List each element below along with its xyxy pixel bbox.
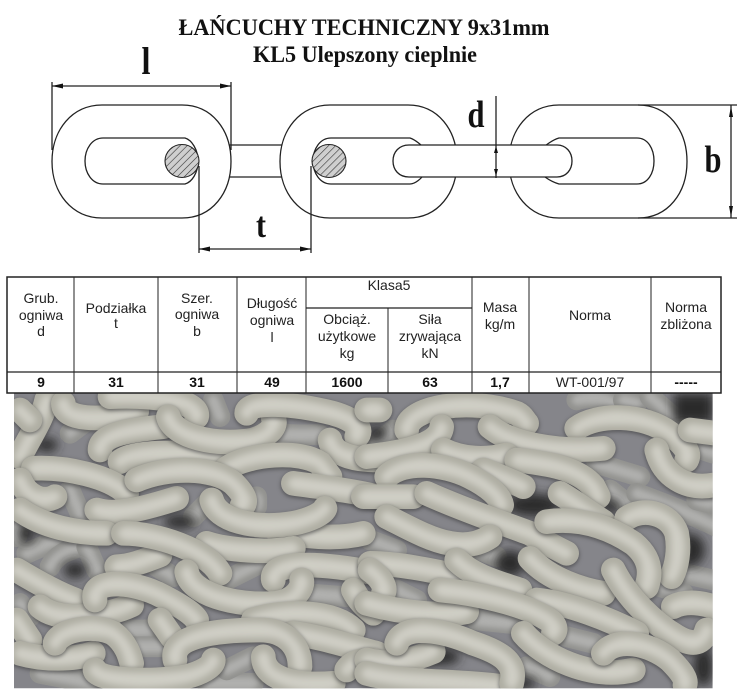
table header: kg/m xyxy=(485,316,515,332)
table data row: 9 xyxy=(37,374,45,390)
table header: Masa xyxy=(483,299,517,315)
title xyxy=(178,15,550,67)
chain diagram xyxy=(52,105,687,218)
table header: b xyxy=(193,323,201,339)
table header: Podziałka xyxy=(86,300,147,316)
front chain links right xyxy=(363,405,717,687)
table header: l xyxy=(270,329,274,345)
chain link 2 xyxy=(280,105,457,218)
dimension b: b xyxy=(704,139,722,181)
dimension b xyxy=(638,105,737,218)
hatched section middle xyxy=(312,144,346,178)
table header xyxy=(19,277,712,361)
connector link right xyxy=(393,145,572,177)
table header: Siła xyxy=(418,311,442,327)
dimension d xyxy=(468,94,498,178)
table data row: 1,7 xyxy=(490,374,510,390)
dimension d: d xyxy=(468,94,484,136)
chain link 1 xyxy=(52,105,231,218)
dimension l xyxy=(52,40,231,150)
hatched section left xyxy=(165,144,199,178)
table header: Długość xyxy=(247,295,297,311)
rear chain links right xyxy=(370,397,717,677)
dark gaps between links xyxy=(18,393,713,690)
table header: Norma xyxy=(569,307,611,323)
table header: ogniwa xyxy=(175,306,219,322)
specification table xyxy=(6,276,722,394)
table header: Grub. xyxy=(23,290,59,306)
chain link 3 xyxy=(509,105,687,218)
table header: Norma xyxy=(665,299,707,315)
table data row: WT-001/97 xyxy=(556,374,624,390)
table header: użytkowe xyxy=(318,328,376,344)
technical drawing and title xyxy=(51,15,737,253)
table header: zrywająca xyxy=(399,328,461,344)
dimension t xyxy=(199,166,311,253)
photo background xyxy=(14,393,713,688)
table header: t xyxy=(114,315,118,331)
table header: kg xyxy=(340,345,354,361)
table data row xyxy=(37,374,698,390)
table header: kN xyxy=(421,345,439,361)
table data row: ----- xyxy=(674,374,698,390)
table header: Klasa5 xyxy=(368,277,411,293)
dimension l: l xyxy=(142,40,151,83)
rear chain links left xyxy=(17,400,483,683)
title: KL5 Ulepszony cieplnie xyxy=(253,42,477,67)
table header: Szer. xyxy=(181,290,213,306)
front chain links left xyxy=(17,396,377,684)
table data row: 63 xyxy=(422,374,438,390)
table grid xyxy=(7,277,721,393)
table data row: 49 xyxy=(264,374,280,390)
table data row: 1600 xyxy=(331,374,363,390)
dimension t: t xyxy=(256,205,266,245)
title: ŁAŃCUCHY TECHNICZNY 9x31mm xyxy=(178,15,550,40)
table header: Obciąż. xyxy=(323,311,371,327)
table header: ogniwa xyxy=(19,307,63,323)
table header: ogniwa xyxy=(250,312,294,328)
chain photograph xyxy=(14,394,713,688)
table header: d xyxy=(37,323,45,339)
table header: zbliżona xyxy=(660,316,712,332)
table data row: 31 xyxy=(108,374,124,390)
table data row: 31 xyxy=(189,374,205,390)
connector link left xyxy=(228,145,282,177)
